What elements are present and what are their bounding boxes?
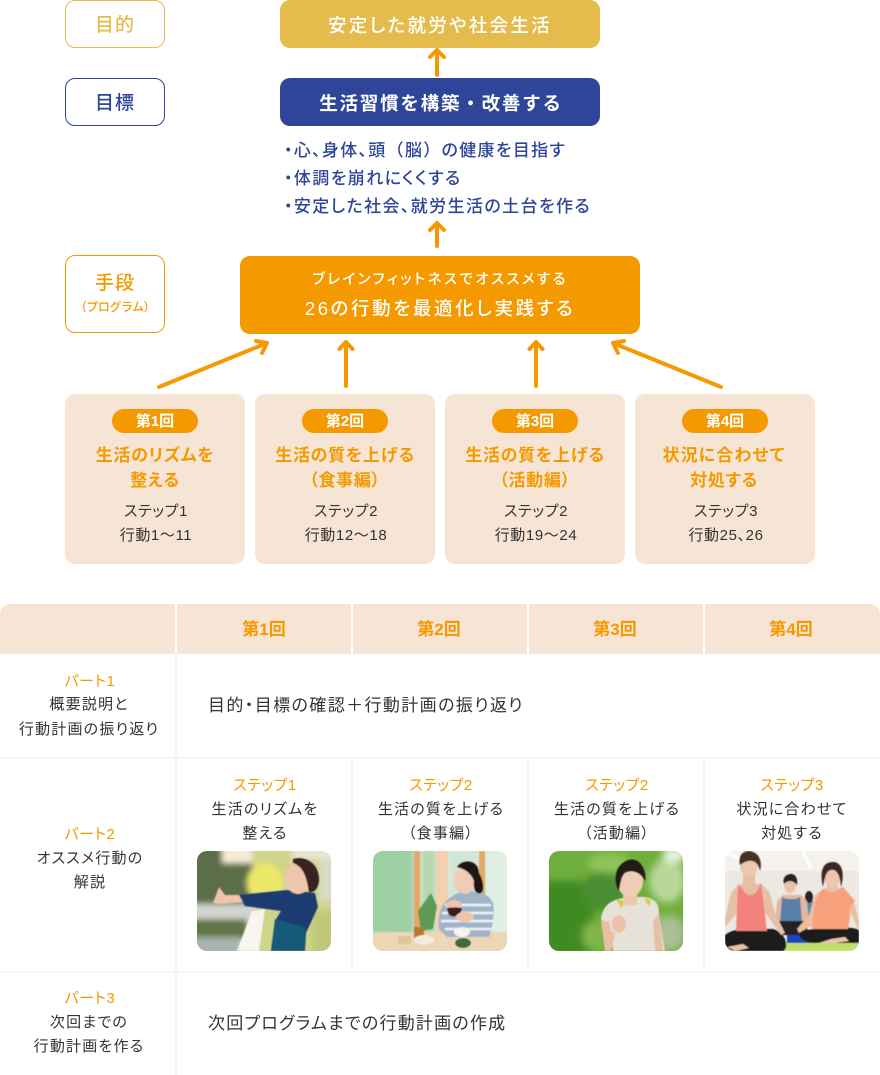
card: session 1 <box>65 394 245 564</box>
card title <box>96 446 214 490</box>
title line 2: （活動編） <box>499 471 571 490</box>
purpose box <box>280 0 600 48</box>
row label: part 3 <box>34 990 144 1055</box>
step: ステップ2 <box>504 503 568 520</box>
arrow: list to goal <box>430 223 444 246</box>
step desc line 1: 状況に合わせて <box>736 801 848 818</box>
header: session 2: 第2回 <box>417 620 461 639</box>
badge: 第4回 <box>706 413 744 430</box>
label: means <box>65 255 165 333</box>
card title <box>662 446 786 490</box>
step desc line 2: （活動編） <box>584 825 650 842</box>
header: session 4: 第4回 <box>769 620 813 639</box>
table header background <box>0 604 880 654</box>
part desc line 1: 概要説明と <box>49 696 129 713</box>
actions: 行動19～24 <box>495 527 577 544</box>
title line 1: 生活の質を上げる <box>275 446 415 465</box>
card: session 3 <box>445 394 625 564</box>
purpose text: 安定した就労や社会生活 <box>328 15 552 36</box>
title line 1: 生活の質を上げる <box>465 446 605 465</box>
title line 2: 対処する <box>690 471 758 490</box>
card: session 2 <box>255 394 435 564</box>
step desc line 1: 生活のリズムを <box>212 801 318 818</box>
goal details list <box>284 141 591 216</box>
step desc line 2: 対処する <box>761 825 823 842</box>
actions: 行動1～11 <box>120 527 192 544</box>
goal label text: 目標 <box>95 93 135 114</box>
step: ステップ3 <box>694 503 758 520</box>
photo: woman stretching on balcony <box>197 851 331 951</box>
list item 3: ・安定した社会、就労生活の土台を作る <box>284 197 591 216</box>
title line 2: （食事編） <box>309 471 381 490</box>
badge <box>682 409 768 433</box>
means title: 26の行動を最適化し実践する <box>305 298 575 319</box>
step desc line 2: （食事編） <box>408 825 474 842</box>
goal box <box>280 78 600 126</box>
step column 4 <box>736 777 848 842</box>
arrow: session 2 <box>340 342 352 386</box>
step: ステップ2 <box>314 503 378 520</box>
badge: 第3回 <box>516 413 554 430</box>
part desc line 2: 行動計画の振り返り <box>19 721 159 738</box>
list item 2: ・体調を崩れにくくする <box>284 169 462 188</box>
purpose label text: 目的 <box>95 15 135 36</box>
badge: 第2回 <box>326 413 364 430</box>
arrow: session 1 <box>159 341 267 387</box>
step desc line 2: 整える <box>242 825 288 842</box>
step name: ステップ3 <box>760 777 824 794</box>
step column 3 <box>554 777 680 842</box>
arrows <box>156 48 724 390</box>
step desc line 1: 生活の質を上げる <box>378 801 504 818</box>
header: session 1: 第1回 <box>242 620 286 639</box>
arrow: session 4 <box>613 341 721 387</box>
means sublabel: （プログラム） <box>75 300 155 314</box>
title line 2: 整える <box>130 471 180 490</box>
card title <box>275 446 415 490</box>
goal text: 生活習慣を構築・改善する <box>319 93 563 114</box>
row 3 content: 次回プログラムまでの行動計画の作成 <box>208 1014 506 1033</box>
part desc line 2: 行動計画を作る <box>34 1038 144 1055</box>
badge <box>492 409 578 433</box>
part name: パート1 <box>65 673 115 690</box>
step: ステップ1 <box>124 503 188 520</box>
part desc line 1: 次回までの <box>50 1014 128 1031</box>
row label: part 1 <box>19 673 159 738</box>
title line 1: 生活のリズムを <box>96 446 214 465</box>
title line 1: 状況に合わせて <box>662 446 786 465</box>
photo: woman jogging in greenery <box>549 851 683 951</box>
step desc line 1: 生活の質を上げる <box>554 801 680 818</box>
step column 2 <box>378 777 504 842</box>
badge: 第1回 <box>136 413 174 430</box>
row 1 content: 目的・目標の確認＋行動計画の振り返り <box>208 696 524 715</box>
actions: 行動12～18 <box>305 527 387 544</box>
step name: ステップ1 <box>233 777 297 794</box>
row label: part 2 <box>37 826 143 891</box>
card title <box>465 446 605 490</box>
photo: three women meditating <box>725 851 859 951</box>
step column 1 <box>212 777 318 842</box>
label: goal <box>65 78 165 126</box>
step name: ステップ2 <box>585 777 649 794</box>
list item 1: ・心、身体、頭（脳）の健康を目指す <box>284 141 566 160</box>
badge <box>112 409 198 433</box>
step name: ステップ2 <box>409 777 473 794</box>
label: purpose <box>65 0 165 48</box>
arrow: session 3 <box>530 342 542 386</box>
card: session 4 <box>635 394 815 564</box>
part desc line 1: オススメ行動の <box>37 850 143 867</box>
part desc line 2: 解説 <box>74 874 106 891</box>
header: session 3: 第3回 <box>593 620 637 639</box>
actions: 行動25、26 <box>688 527 764 544</box>
photo: woman eating a meal <box>373 851 507 951</box>
badge <box>302 409 388 433</box>
arrow: goal to purpose <box>430 50 444 75</box>
part name: パート2 <box>65 826 115 843</box>
means subtitle: ブレインフィットネスでオススメする <box>312 272 568 288</box>
means label text: 手段 <box>95 273 135 294</box>
means box <box>240 256 640 334</box>
part name: パート3 <box>65 990 115 1007</box>
